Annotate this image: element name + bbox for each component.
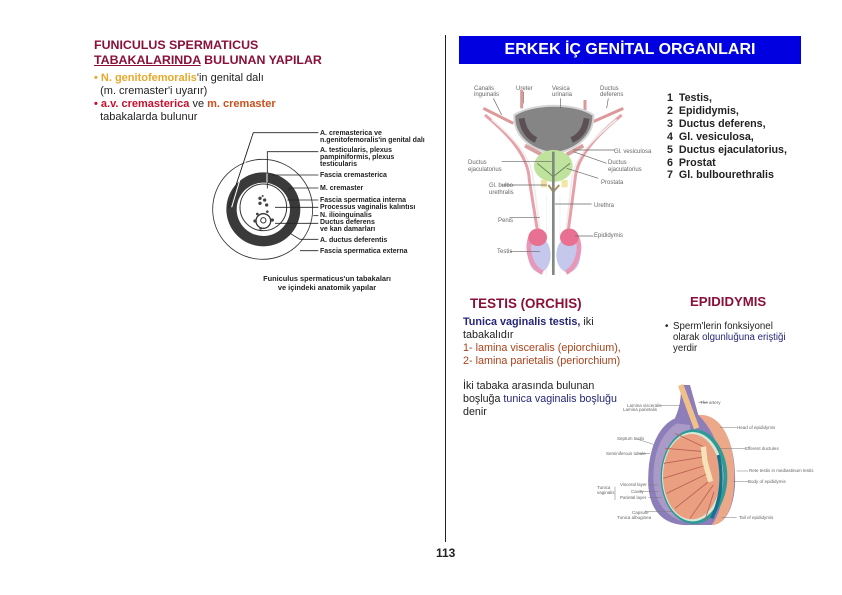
cross-section labels: Fascia spermatica externa — [320, 248, 408, 255]
organ list: 1 Testis, — [667, 92, 712, 104]
text block: funiculus structures: (m. cremaster'i uyarır) — [100, 85, 207, 97]
organ list: 5 Ductus ejaculatorius, — [667, 144, 787, 156]
organ labels: Epididymis — [594, 233, 623, 239]
text block: tunica vaginalis: Tunica vaginalis testis, iki — [463, 316, 594, 328]
organ labels: Ureter — [516, 86, 533, 92]
cross-section labels: N. ilioinguinalis — [320, 212, 372, 219]
cross-section labels: ve kan damarları — [320, 226, 375, 233]
text block: tunica vaginalis — [463, 316, 621, 367]
cross-section labels: M. cremaster — [320, 185, 363, 192]
testis labels: Tunica — [597, 485, 611, 490]
organ list: 7 Gl. bulbourethralis — [667, 169, 774, 181]
text block: funiculus structures: • a.v. cremasterica ve m. cremaster — [94, 98, 276, 110]
text block: funiculus structures: tabakalarda bulunur — [100, 111, 197, 123]
organ labels: Gl. bulbo- — [489, 183, 515, 189]
cross-section labels: n.genitofemoralis'in genital dalı — [320, 137, 425, 144]
cross-section labels: testicularis — [320, 161, 357, 168]
cross-section labels: A. cremasterica ve — [320, 130, 382, 137]
testis labels: Septum testis — [617, 436, 645, 441]
organ list — [667, 92, 787, 181]
text block: funiculus structures: • N. genitofemoralis'in genital dalı — [94, 72, 264, 84]
text block: funiculus structures — [94, 72, 276, 123]
title banner: ERKEK İÇ GENİTAL ORGANLARI — [505, 41, 755, 58]
text block: epididymis: olarak olgunluğuna eriştiği — [673, 332, 786, 343]
page number: 113 — [436, 546, 455, 560]
testis labels: vaginalis — [597, 490, 615, 495]
organ labels: urethralis — [489, 190, 514, 196]
testis labels: Visceral layer — [620, 482, 647, 487]
organ labels: urinaria — [552, 92, 573, 98]
testis labels: The artery — [700, 400, 721, 405]
text block: tunica vaginalis: 2- lamina parietalis (periorchium) — [463, 355, 620, 367]
text block: epididymis — [665, 321, 786, 354]
testis labels: Tail of epididymis — [739, 515, 774, 520]
text block: cavity: boşluğa tunica vaginalis boşluğu — [463, 393, 617, 405]
cross-section labels: Fascia cremasterica — [320, 172, 387, 179]
organ list: 4 Gl. vesiculosa, — [667, 131, 754, 143]
cross-section caption: Funiculus spermaticus'un tabakaları — [263, 274, 391, 283]
organ labels: Vesica — [552, 86, 570, 92]
organ labels: ejaculatorius — [468, 167, 502, 173]
organ labels: Ductus — [468, 160, 487, 166]
organ list: 2 Epididymis, — [667, 105, 739, 117]
cross-section labels: A. testicularis, plexus — [320, 147, 392, 154]
organ labels: deferens — [600, 92, 623, 98]
text block: epididymis: Sperm'lerin fonksiyonel — [673, 321, 773, 332]
organ labels: Ductus — [600, 86, 619, 92]
testis labels: Lamina parietalis — [623, 407, 658, 412]
heading: testis: TESTIS (ORCHIS) — [470, 296, 582, 311]
testis labels: Head of epididymis — [737, 425, 776, 430]
heading: funiculus spermaticus — [94, 38, 322, 67]
cross-section labels — [320, 130, 425, 255]
text block: tunica vaginalis: tabakalıdır — [463, 329, 513, 341]
title banner — [459, 36, 801, 64]
cross-section caption: ve içindeki anatomik yapılar — [278, 283, 376, 292]
organ list: 3 Ductus deferens, — [667, 118, 766, 130]
testis labels: Parietal layer — [620, 495, 647, 500]
cross-section labels: A. ductus deferentis — [320, 237, 387, 244]
cross-section labels: Fascia spermatica interna — [320, 197, 406, 204]
organ labels: Gl. vesiculosa — [614, 149, 652, 155]
testis labels: Tunica albuginea — [617, 515, 652, 520]
organ labels: Testis — [497, 249, 512, 255]
testis labels: Cavity — [631, 489, 644, 494]
cross-section labels: Processus vaginalis kalıntısı — [320, 204, 415, 211]
text block: cavity — [463, 380, 617, 418]
organ labels: Prostata — [601, 180, 624, 186]
testis labels: Seminiferous tubule — [606, 451, 646, 456]
organ labels: Urethra — [594, 203, 615, 209]
testis labels: Body of epididymis — [748, 479, 787, 484]
cross-section caption — [263, 274, 391, 292]
text block: epididymis: • — [665, 321, 668, 332]
testis labels: Efferent ductules — [745, 446, 779, 451]
text block: epididymis: yerdir — [673, 343, 697, 354]
testis labels: Capsule — [632, 510, 649, 515]
testis labels — [597, 400, 814, 520]
organ labels: Penis — [498, 218, 513, 224]
text block: cavity: İki tabaka arasında bulunan — [463, 380, 594, 392]
text block: tunica vaginalis: 1- lamina visceralis (epiorchium), — [463, 342, 621, 354]
heading: epididymis: EPIDIDYMIS — [690, 294, 766, 309]
vertical divider — [445, 35, 446, 542]
organ labels: ejaculatorius — [608, 167, 642, 173]
heading: funiculus spermaticus: TABAKALARINDA BULUNAN YAPILAR — [94, 53, 322, 67]
cross-section labels: pampiniformis, plexus — [320, 154, 394, 161]
text block: cavity: denir — [463, 406, 487, 418]
organ labels: Ductus — [608, 160, 627, 166]
testis labels: Rete testis in mediastinum testis — [749, 468, 814, 473]
organ labels: inguinalis — [474, 92, 499, 98]
organ list: 6 Prostat — [667, 157, 716, 169]
testis labels: Lamina visceralis — [627, 403, 662, 408]
heading: funiculus spermaticus: FUNICULUS SPERMATICUS — [94, 38, 258, 52]
organ labels — [468, 86, 652, 255]
cross-section labels: Ductus deferens — [320, 219, 375, 226]
organ labels: Canalis — [474, 86, 494, 92]
